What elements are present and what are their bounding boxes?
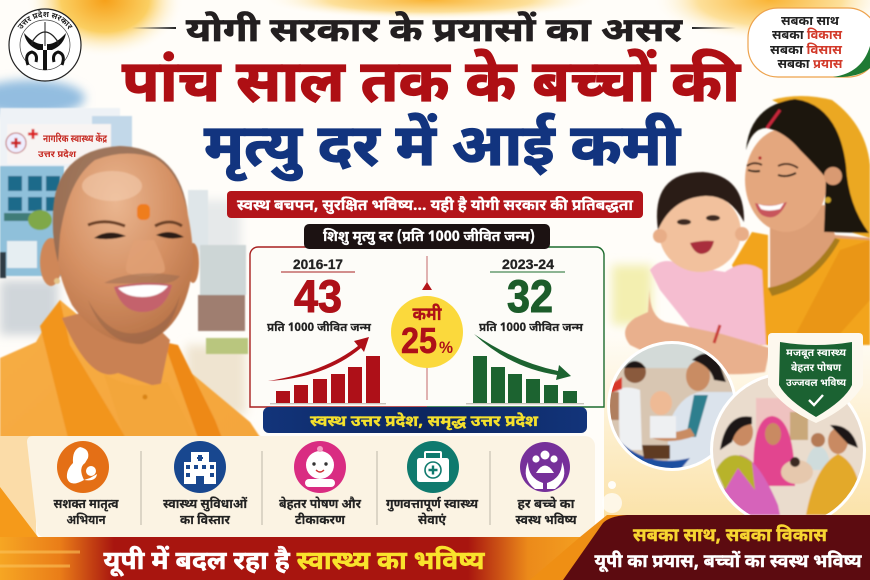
banner: bottom right <box>530 515 870 580</box>
service: every child's future: स्वस्थ भविष्य <box>516 512 578 530</box>
logo: UP government seal <box>8 8 82 82</box>
mouth <box>114 283 172 312</box>
photo: health workers with mothers <box>710 372 866 528</box>
badge: sabka saath: सबका विसास <box>770 42 843 60</box>
badge: shield: उज्जवल भविष्य <box>786 377 847 391</box>
left corner backdrop <box>0 436 38 537</box>
panel: five service cards <box>27 436 595 537</box>
kurta <box>104 374 196 438</box>
right column: 2023-24: प्रति 1000 जीवित जन्म <box>479 321 584 336</box>
baby head <box>659 192 741 272</box>
heading: red line: पांच साल तक के बच्चों की <box>122 49 741 125</box>
ribbon: healthy UP <box>263 407 587 433</box>
banner: bottom left <box>0 537 600 580</box>
head <box>53 146 193 344</box>
chart title pill <box>304 224 550 249</box>
left column: 2016-17: 2016-17 <box>293 256 343 272</box>
left column: 2016-17: 43 <box>294 271 342 322</box>
badge: sabka saath: सबका प्रयास <box>778 58 843 74</box>
stubble <box>53 146 188 262</box>
badge: shield <box>768 333 863 423</box>
badge: sabka saath: सबका साथ <box>781 15 840 31</box>
face <box>745 128 827 232</box>
baby dress <box>650 261 766 345</box>
photo: Yogi portrait <box>0 146 262 537</box>
arrow: falling green <box>474 334 571 380</box>
photo: doctor and child <box>605 340 739 471</box>
logo: UP government seal: उत्तर प्रदेश सरकार <box>18 10 73 30</box>
bed and parent <box>621 441 690 468</box>
banner: bottom left: यूपी में बदल रहा है स्वास्थ्य का भविष्य <box>104 545 485 580</box>
callout: 25 percent reduction: 25 <box>401 320 437 361</box>
neck and shoulder <box>770 205 870 295</box>
badge: shield: बेहतर पोषण <box>791 361 842 376</box>
moustache <box>104 273 180 284</box>
service: every child's future <box>516 442 578 530</box>
right column: 2023-24: 2023-24 <box>502 256 554 272</box>
badge: sabka saath <box>748 8 870 77</box>
left column: 2016-17: प्रति 1000 जीवित जन्म <box>267 321 372 336</box>
service: nutrition and vaccination: बेहतर पोषण और <box>279 496 361 514</box>
nose <box>126 240 165 276</box>
banner: bottom right: सबका साथ, सबका विकास <box>633 525 828 549</box>
right woman <box>806 454 862 515</box>
middle woman <box>753 416 795 486</box>
callout: 25 percent reduction: कमी <box>412 304 442 328</box>
callout: 25 percent reduction <box>391 296 463 368</box>
heading: navy line: मृत्यु दर में आई कमी <box>204 113 681 189</box>
service: maternal campaign: सशक्त मातृत्व <box>54 498 119 514</box>
doctor <box>668 392 735 470</box>
saffron robe <box>0 300 262 537</box>
tilak <box>137 204 150 220</box>
service: quality health services: गुणवत्तापूर्ण स्वास्थ्य <box>386 496 479 514</box>
service: nutrition and vaccination <box>279 441 361 530</box>
saree <box>732 232 870 345</box>
babies <box>781 460 813 484</box>
heading: top line: योगी सरकार के प्रयासों का असर <box>186 10 684 55</box>
ears <box>40 238 62 286</box>
bar chart: rising red <box>270 356 386 404</box>
right scarf <box>164 342 222 438</box>
badge: sabka saath: सबका विकास <box>772 27 843 45</box>
elder <box>805 446 830 470</box>
service: quality health services: सेवाएं <box>418 512 446 530</box>
hospital sign text <box>38 132 108 161</box>
veil <box>772 96 870 238</box>
callout: 25 percent reduction: % <box>439 338 453 357</box>
child helper <box>618 388 642 450</box>
decoration: diya glow <box>602 481 622 513</box>
left column: 2016-17 <box>267 256 372 336</box>
hair <box>746 99 869 233</box>
eyes and brows <box>88 222 182 226</box>
service: health facilities: का विस्तार <box>180 512 230 530</box>
neck <box>62 300 170 388</box>
arrow: rising red <box>268 337 369 381</box>
photo: mother and baby <box>625 96 870 374</box>
scene: hospital building <box>0 108 248 354</box>
badge: shield: मजबूत स्वास्थ्य <box>786 348 847 361</box>
chart title pill: शिशु मृत्यु दर (प्रति 1000 जीवित जन्म) <box>323 228 535 247</box>
panel: infant mortality chart <box>250 224 604 407</box>
hospital sign text: उत्तर प्रदेश <box>38 147 76 161</box>
hospital sign text: नागरिक स्वास्थ्य केंद्र <box>43 132 108 147</box>
service: every child's future: हर बच्चे का <box>518 496 575 514</box>
ribbon: healthy UP: स्वस्थ उत्तर प्रदेश, समृद्ध उत्तर प्रदेश <box>310 411 538 433</box>
bar chart: falling green <box>466 356 584 404</box>
service: health facilities <box>163 441 248 530</box>
right column: 2023-24: 32 <box>507 271 553 322</box>
slogan pill: स्वस्थ बचपन, सुरक्षित भविष्य... यही है योगी सरकार की प्रतिबद्धता <box>237 195 633 217</box>
banner: bottom right: यूपी का प्रयास, बच्चों का स्वस्थ भविष्य <box>594 550 862 575</box>
left scarf <box>40 300 126 438</box>
baby <box>650 391 672 415</box>
service: maternal campaign: अभियान <box>66 512 106 530</box>
right column: 2023-24 <box>479 256 584 336</box>
service: nutrition and vaccination: टीकाकरण <box>295 512 346 530</box>
service: maternal campaign <box>54 441 119 530</box>
service: quality health services <box>386 441 479 530</box>
service: health facilities: स्वास्थ्य सुविधाओं <box>163 496 248 514</box>
jaw stubble <box>88 295 180 344</box>
left woman <box>722 455 780 515</box>
arms <box>625 282 770 374</box>
